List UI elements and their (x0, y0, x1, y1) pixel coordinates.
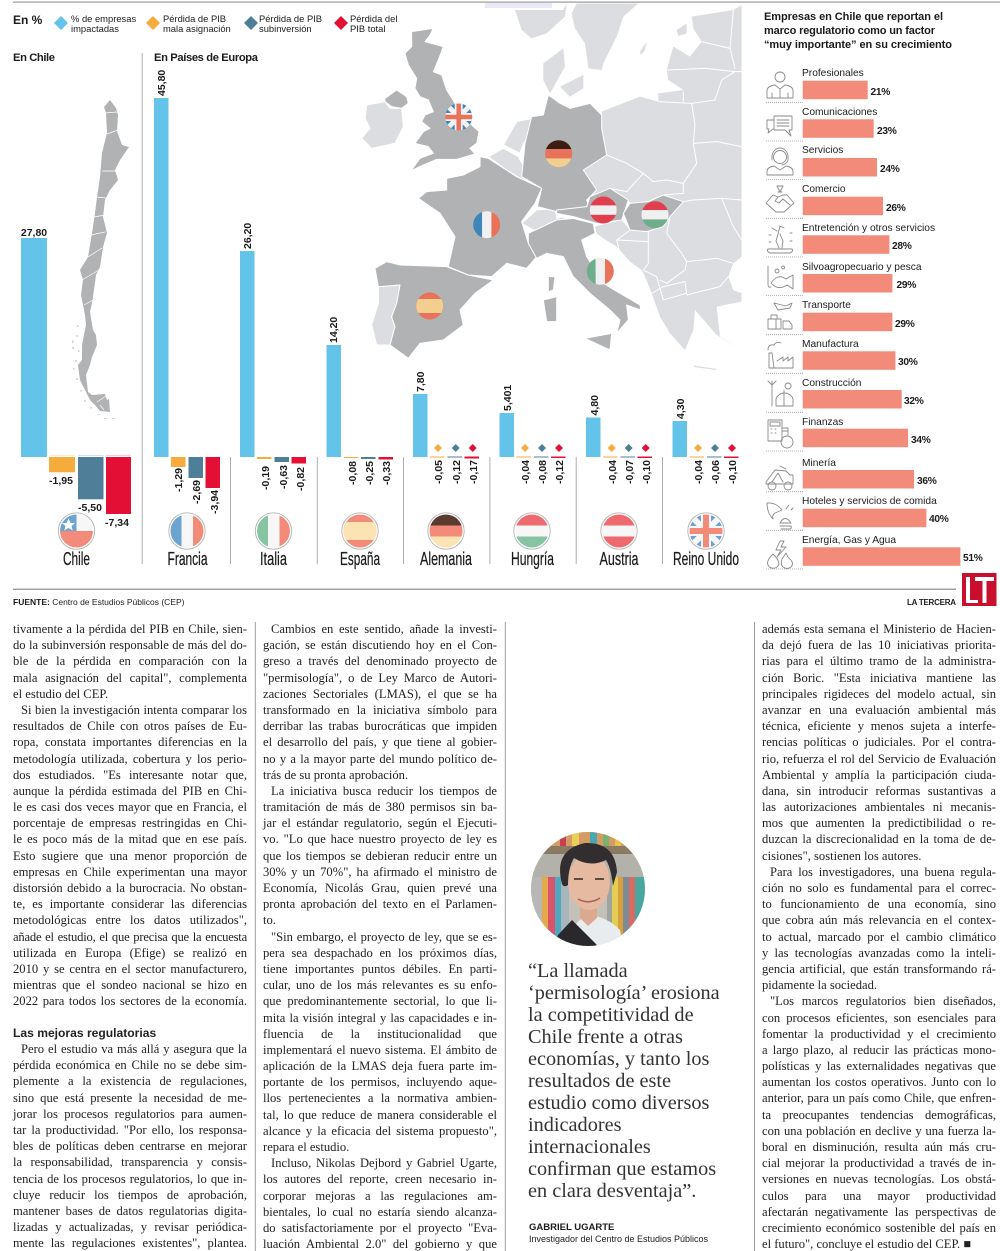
pull quote: estudio como diversos (528, 1092, 709, 1114)
sector labels: Construcción (802, 378, 861, 389)
article column 3: pidamente la sociedad. (762, 978, 877, 992)
article column 1: empresas en Chile experimentan una mayor (13, 865, 247, 879)
icon: finance (768, 420, 793, 448)
article column 3: con procesos eficientes, son esenciales para (762, 1010, 996, 1024)
sector labels: Servicios (802, 145, 843, 156)
flag: España (342, 513, 378, 549)
article column 3: rias para el último tramo de la administra- (762, 654, 996, 668)
country names: Alemania (420, 548, 472, 569)
bar group: Hungría: 5,401 (502, 385, 514, 411)
article column 3: versiones en nuevas tecnologías. Los obstá- (762, 1172, 996, 1186)
article column 1: metodológicas entre los datos utilizados", (13, 913, 247, 927)
article column 3: culos para una mayor productividad (762, 1189, 996, 1203)
sector values: 23% (877, 126, 897, 137)
article column 3: duzcan la discrecionalidad en la toma de de- (762, 832, 996, 846)
sector labels: Profesionales (802, 68, 864, 79)
credit: La Tercera: LA TERCERA (907, 598, 956, 607)
article column 1 (12, 622, 248, 1250)
article column 3: fomentar la productividad y el crecimiento (762, 1027, 996, 1041)
sector labels: Energía, Gas y Agua (802, 535, 896, 546)
legend: impactadas (71, 23, 119, 34)
sector values (870, 87, 983, 564)
article column 1: tivamente a la pérdida del PIB en Chile, sien- (13, 622, 247, 636)
legend: Pérdida de PIB (163, 13, 226, 24)
article column 1: Esto sugiere que una menor proporción de (13, 849, 247, 863)
bar group: Alemania: -0,05 (433, 460, 445, 484)
pull quote: la competitividad de (528, 1004, 694, 1026)
article column 2: do satisfactoriamente por el proyecto "Eva- (263, 1221, 497, 1235)
bar group: Reino Unido (672, 398, 739, 484)
map flag: France (473, 211, 501, 239)
map flag: Italy (586, 257, 614, 285)
article column 1: pérdida económica en Chile no se debe sim- (13, 1058, 247, 1072)
article column 2: 30% y un 70%", ha afirmado el ministro de (263, 865, 497, 879)
bottom rule (13, 588, 956, 590)
article column 3: además esta semana el Ministerio de Hacien- (762, 622, 996, 636)
article column 3: cisiones", sostienen los autores. (762, 849, 921, 863)
bar group: España (326, 317, 393, 485)
article column 3: crecimiento económico sostenible del país en (762, 1221, 996, 1235)
bar group: Reino Unido: -0,06 (710, 460, 722, 484)
article column 1: Las mejoras regulatorias (13, 1026, 156, 1040)
article column 1: añade el estudio, el que precisa que la encuesta (13, 930, 247, 944)
article column 3: polísticas y las externalidades negativas que (762, 1059, 996, 1073)
sector values: 21% (870, 87, 890, 98)
article column 2: vo. "Lo que hace nuestro proyecto de ley es (263, 832, 497, 846)
country names: Reino Unido (673, 548, 739, 569)
article column 1: 2022 para todos los sectores de la economía. (13, 994, 247, 1008)
map: Europe (362, 3, 742, 371)
bar group: Austria: -0,07 (624, 460, 636, 484)
article column 1: ropa, constata importantes diferencias en la (13, 735, 247, 749)
article column 3: mos que aumenten la predictibilidad o re- (762, 816, 996, 830)
bar group: Italia: -0,19 (260, 466, 272, 490)
article column 2: transformado en la iniciativa símbolo para (263, 703, 497, 717)
article column 2: jar el estándar regulatorio, según el Ejecuti- (263, 816, 497, 830)
region: highlighted countries (375, 28, 683, 358)
article column 1: bles de políticas deben centrarse en mejorar (13, 1139, 247, 1153)
flag: Austria (601, 513, 637, 549)
icon: hotels and food (767, 503, 793, 529)
article column 2: el desarrollo del país, y que tiene al gobier- (263, 735, 497, 749)
icon: handshake (766, 186, 794, 212)
article column 3: to actual, marcado por el cambio climático (762, 930, 996, 944)
article column 1: mientras que el sondeo nacional se hizo en (13, 978, 247, 992)
icon: call centre (767, 148, 793, 175)
icon: fish (768, 266, 793, 289)
chart title (764, 11, 952, 51)
sector values: 28% (892, 241, 912, 252)
chart title: “muy importante” en su crecimiento (764, 39, 952, 51)
sector values: 40% (929, 514, 949, 525)
sector values: 26% (886, 203, 906, 214)
bar group: Reino Unido: -0,04 (693, 460, 705, 484)
sector bars (803, 81, 960, 566)
article column 2: aplicación de la LMAS deja fuera parte im- (263, 1059, 497, 1073)
bar group: Hungría: -0,12 (554, 460, 566, 484)
article column 2: llos pertenecientes a la normativa ambien- (263, 1091, 497, 1105)
bar group: Austria: 4,80 (589, 395, 601, 416)
article column 1: tencia de los procesos regulatorios, lo que in- (13, 1172, 247, 1186)
pull quote: internacionales (528, 1136, 651, 1158)
article column 2: pronta aprobación del texto en el Parlamen- (263, 897, 497, 911)
sector labels: Minería (802, 458, 836, 469)
icon: chat (767, 116, 792, 136)
article column 3: técnica, eficiente y menos sujeta a interfe- (762, 719, 996, 733)
article column 1: cluye reducir los tiempos de aprobación, (13, 1188, 247, 1202)
country names: Italia (260, 548, 287, 569)
article column 2: corporar mejoras a las regulaciones am- (263, 1189, 497, 1203)
sector labels: Finanzas (802, 417, 843, 428)
sector labels: Hoteles y servicios de comida (802, 496, 937, 507)
article column 1: la responsabilidad, transparencia y consis- (13, 1155, 247, 1169)
article column 2: to. (263, 913, 276, 927)
article column 2: "permisología", o de Ley Marco de Autori- (263, 671, 497, 685)
bar group: Austria (586, 395, 653, 484)
article column 1: utilizada en Europa (Efige) se realizó en (13, 946, 247, 960)
article column 1: el estudio del CEP. (13, 687, 108, 701)
country names (63, 548, 739, 569)
article column 3: que cobra aún más relevancia en el contex- (762, 913, 996, 927)
source note: FUENTE: Centro de Estudios Públicos (CEP) (13, 597, 185, 607)
bar group: Hungría: -0,08 (537, 460, 549, 484)
article column 3: "Los marcos regulatorios bien diseñados, (770, 994, 996, 1008)
article column 1: lizadas y actualizadas, y revisar periódica- (13, 1220, 247, 1234)
sector values: 30% (898, 357, 918, 368)
article column 2 (262, 622, 497, 1251)
article column 2: tiene importantes puntos débiles. En parti- (263, 962, 497, 976)
article column 1: porcentaje de empresas restringidas en Chi- (13, 816, 247, 830)
article column 3: el futuro", concluye el estudio del CEP. ■ (762, 1237, 971, 1251)
pull quote: confirman que estamos (528, 1158, 716, 1180)
bar group: Chile: -7,34 (105, 517, 129, 529)
country names: Francia (168, 548, 208, 569)
pull quote: indicadores (528, 1114, 622, 1136)
article column 1: mente las regulaciones existentes", plantea. (13, 1236, 247, 1250)
flag: Alemania (428, 513, 464, 549)
article column 3: afectarán negativamente las perspectivas de (762, 1205, 996, 1219)
icon: transport (768, 303, 792, 329)
bar group: Francia: 45,80 (156, 70, 168, 96)
article column 3: aumentan los costos operativos. Junto con lo (762, 1075, 996, 1089)
icon: professional (767, 72, 793, 98)
article column 2: cular, uno de los más relevantes es su enfo- (263, 978, 497, 992)
article column 3: ta preocupantes tendencias demográficas, (762, 1108, 996, 1122)
article column 3: principales rigideces del modelo actual, sin (762, 687, 996, 701)
article column 3: ción Boric. "Esta iniciativa mantiene las (762, 671, 996, 685)
bar group: Alemania: -0,17 (468, 460, 480, 484)
article column 2: zaciones Sectoriales (LMAS), el que se ha (263, 687, 497, 701)
sector values: 29% (895, 319, 915, 330)
article column 2: Incluso, Nikolas Dejbord y Gabriel Ugarte, (271, 1156, 497, 1170)
flag: Chile (58, 513, 95, 549)
map flag: United Kingdom (445, 103, 473, 131)
article column 1: Pero el estudio va más allá y asegura que la (21, 1042, 247, 1056)
pull quote: ‘permisología’ erosiona (528, 982, 720, 1004)
icon: mining (766, 466, 793, 490)
article column 3: Para los investigadores, una buena regula- (770, 865, 996, 879)
flag: Hungría (514, 513, 550, 549)
article column 2: los autores del reporte, creen necesario in- (263, 1172, 497, 1186)
article column 1: plemente a la existencia de regulaciones, (13, 1074, 247, 1088)
article column 2: luación Ambiental 2.0" del gobierno y que (263, 1237, 497, 1251)
logo: LT (962, 573, 996, 606)
article column 3: dana, sin introducir reformas sustantivas a (762, 784, 996, 798)
article column 3: boral en disminución, resulta aún más cru- (762, 1140, 996, 1154)
legend: subinversión (259, 23, 312, 34)
article column 1: le es casi dos veces mayor que en Francia, el (13, 800, 247, 814)
heading: En Países de Europa: En Países de Europa (154, 52, 259, 64)
article column 3: cial mejorar la productividad a través de in- (762, 1156, 996, 1170)
flag: Italia (255, 513, 292, 549)
bar group: Alemania (413, 371, 480, 484)
heading: En %: En % (13, 13, 43, 27)
article column 1: resultados de Chile con otros países de Eu- (13, 719, 247, 733)
country names: Austria (600, 548, 639, 569)
pull quote: “La llamada (528, 960, 628, 982)
bar group: Chile: -5,50 (78, 502, 102, 514)
article column 3: da dejó fuera de las 10 iniciativas priorita- (762, 638, 996, 652)
sector values: 51% (963, 553, 983, 564)
bar group: España: -0,08 (347, 461, 359, 485)
article column 3: avanzar en una evaluación ambiental más (762, 703, 996, 717)
bar group: Alemania: 7,80 (415, 371, 427, 392)
map flag: Spain (416, 292, 444, 320)
bar group: Chile: -1,95 (49, 475, 73, 487)
article column 1: metodología utilizada, cobertura y los perio- (13, 752, 247, 766)
map flag: Germany (545, 140, 573, 168)
quote attribution: Investigador del Centro de Estudios Públicos (529, 1234, 708, 1244)
legend: Pérdida de PIB (259, 13, 322, 24)
article column 1: te, es importante considerar las diferencias (13, 897, 247, 911)
sector labels: Transporte (802, 300, 851, 311)
pull quote: resultados de este (528, 1070, 671, 1092)
article column 3: ción no solo es fundamental para el correc- (762, 881, 996, 895)
article column 1: tar la productividad. "Por ello, los responsa- (13, 1123, 247, 1137)
bar group: Reino Unido: -0,10 (727, 460, 739, 484)
legend: Pérdida del (350, 13, 397, 24)
flag: Francia (169, 513, 205, 549)
pull quote: economías, y tanto los (528, 1048, 709, 1070)
article column 2: tramitación de más de 380 permisos sin ba- (263, 800, 497, 814)
article column 1: jorar los procesos regulatorios para aumen- (13, 1107, 247, 1121)
icon: construction (768, 381, 793, 406)
quote attribution: GABRIEL UGARTE (529, 1222, 614, 1233)
article column 1: Si bien la investigación intenta comparar los (21, 703, 247, 717)
map flag: Hungary (641, 201, 669, 229)
icon: entertainment (767, 226, 793, 253)
article column 3: gencia artificial, que están transformando rá- (762, 962, 996, 976)
map: Chile (72, 100, 129, 419)
country names: España (340, 548, 380, 569)
article column 1: mala asignación del capital", complementa (13, 671, 247, 685)
sector labels: Manufactura (802, 339, 859, 350)
article column 2: fluencia de la institucionalidad que (263, 1027, 497, 1041)
article column 2: mita la visión integral y las capacidades e in- (263, 1010, 497, 1024)
pull quote: Chile frente a otras (528, 1026, 683, 1048)
pull quote (528, 960, 720, 1202)
article column 2: greso a través del denominado proyecto de (263, 654, 497, 668)
article column 2: "Sin embargo, el proyecto de ley, que se es- (271, 930, 497, 944)
article column 3: to funcionamiento de una economía, sino (762, 897, 996, 911)
bar group: Austria: -0,10 (641, 460, 653, 484)
chart title: Empresas en Chile que reportan el (764, 11, 943, 23)
bar group: Francia: -1,29 (173, 468, 185, 492)
article column 2: Cambios en este sentido, añade la investi- (271, 622, 497, 636)
bar group: Francia (154, 70, 221, 514)
legend: % de empresas (71, 13, 136, 24)
article column 3: a largo plazo, al reducir las prácticas mono- (762, 1043, 996, 1057)
icon: factory (768, 342, 793, 368)
article column 3: las autorizaciones ambientales ni mecanis- (762, 800, 996, 814)
article column 1: ble de la pérdida en comparación con la (13, 654, 247, 668)
panel: sector chart (764, 11, 983, 569)
pull quote: en clara desventaja”. (528, 1180, 696, 1202)
article column 2: Economía, Nicolás Grau, quien prevé una (263, 881, 497, 895)
article column 3: con una población en declive y una fuerza la- (762, 1124, 996, 1138)
article column 1: 2010 y se centra en el sector manufacturero, (13, 962, 247, 976)
article column 1: aunque la pérdida estimada del PIB en Chi- (13, 784, 247, 798)
bar group: Chile: 27,80 (21, 227, 47, 239)
article column 2: La iniciativa busca reducir los tiempos de (271, 784, 497, 798)
sector values: 24% (880, 164, 900, 175)
country names: Hungría (511, 548, 554, 569)
article column 1: distorsión debido a la burocracia. No obstan- (13, 881, 247, 895)
article column 2: implementará el nuevo sistema. El ámbito de (263, 1043, 497, 1057)
photo: Gabriel Ugarte (530, 830, 647, 950)
article column 2: repara el estudio. (263, 1140, 349, 1154)
article column 3: Ambiental y amplía la participación ciuda- (762, 768, 996, 782)
bar group: Alemania: -0,12 (451, 460, 463, 484)
legend: PIB total (350, 23, 385, 34)
article column 2: pera sea despachado en los próximos días, (263, 946, 497, 960)
heading: En Chile: En Chile (13, 52, 55, 64)
article column 2: trás de su pronta aprobación. (263, 768, 408, 782)
article column 2: bientales, lo cual no estaría siendo alcanza- (263, 1205, 497, 1219)
column rules (255, 622, 755, 1251)
article column 3: rencias políticas o judiciales. Por el contra- (762, 735, 996, 749)
legend (54, 13, 397, 34)
article column 2: que los tiempos se debieran reducir entre un (263, 849, 497, 863)
bar group: Italia (240, 223, 307, 491)
article column 2: derribar las trabas burocráticas que impiden (263, 719, 497, 733)
bar group: Chile (21, 227, 131, 529)
article column 1: mantener bases de datos regulatorias digita- (13, 1204, 247, 1218)
bar group: España: -0,25 (364, 461, 376, 485)
article column 3: anterior, para un país como Chile, que enfren- (762, 1091, 996, 1105)
bar group: Hungría (500, 385, 566, 484)
article column 2: no y a la mayor parte del mundo político de- (263, 752, 497, 766)
article column 2: que predominantemente sectorial, lo que li- (263, 994, 497, 1008)
chart title: marco regulatorio como un factor (764, 25, 936, 37)
article column 2: gación, se están discutiendo hoy en el Con- (263, 638, 497, 652)
sector labels: Comunicaciones (802, 107, 877, 118)
article column 2: tal, lo que reduce de manera considerable el (263, 1108, 497, 1122)
article column 2: alcance y la eficacia del sistema propuesto", (263, 1124, 497, 1138)
quote attribution (529, 1222, 708, 1244)
sector values: 29% (896, 280, 916, 291)
article column 3: rio, refuerza el rol del Servicio de Evaluación (762, 752, 996, 766)
bar group: Italia: -0,82 (295, 467, 307, 491)
bar group: España: 14,20 (328, 317, 340, 343)
map flag: Austria (589, 196, 617, 224)
bar group: Hungría: -0,04 (520, 460, 532, 484)
legend: mala asignación (163, 23, 231, 34)
sector values: 32% (904, 396, 924, 407)
bar group: Italia: 26,20 (242, 223, 254, 249)
article column 1: do la subinversión responsable de más del do- (13, 638, 247, 652)
bar group: Francia: -3,94 (209, 490, 221, 514)
article column 3: y las tecnologías avanzadas como la inteli- (762, 946, 996, 960)
region: eastern Europe (583, 5, 742, 350)
sector values: 34% (911, 435, 931, 446)
country names: Chile (63, 548, 90, 569)
bar group: España: -0,33 (381, 461, 393, 485)
bar group: Italia: -0,63 (278, 465, 290, 489)
article column 1: dos estudiados. "Es interesante notar que, (13, 768, 247, 782)
sector labels (802, 68, 937, 546)
article column 1: le es poco más de la mitad que en ese país. (13, 832, 247, 846)
sector values: 36% (917, 476, 937, 487)
flag: Reino Unido (688, 513, 724, 549)
article column 2: portante de los permisos, incluyendo aque- (263, 1075, 497, 1089)
dividers (142, 53, 663, 564)
article column 1: sino que está presente la necesidad de me- (13, 1091, 247, 1105)
sector labels: Comercio (802, 184, 846, 195)
icon: energy, gas and water (768, 541, 792, 568)
bar group: Francia: -2,69 (191, 480, 203, 504)
bar group: Austria: -0,04 (607, 460, 619, 484)
article column 3 (762, 622, 996, 1251)
dotted separators (766, 102, 803, 569)
bar group: Reino Unido: 4,30 (675, 398, 687, 419)
sector labels: Silvoagropecuario y pesca (802, 262, 922, 273)
sector labels: Entretención y otros servicios (802, 223, 935, 234)
